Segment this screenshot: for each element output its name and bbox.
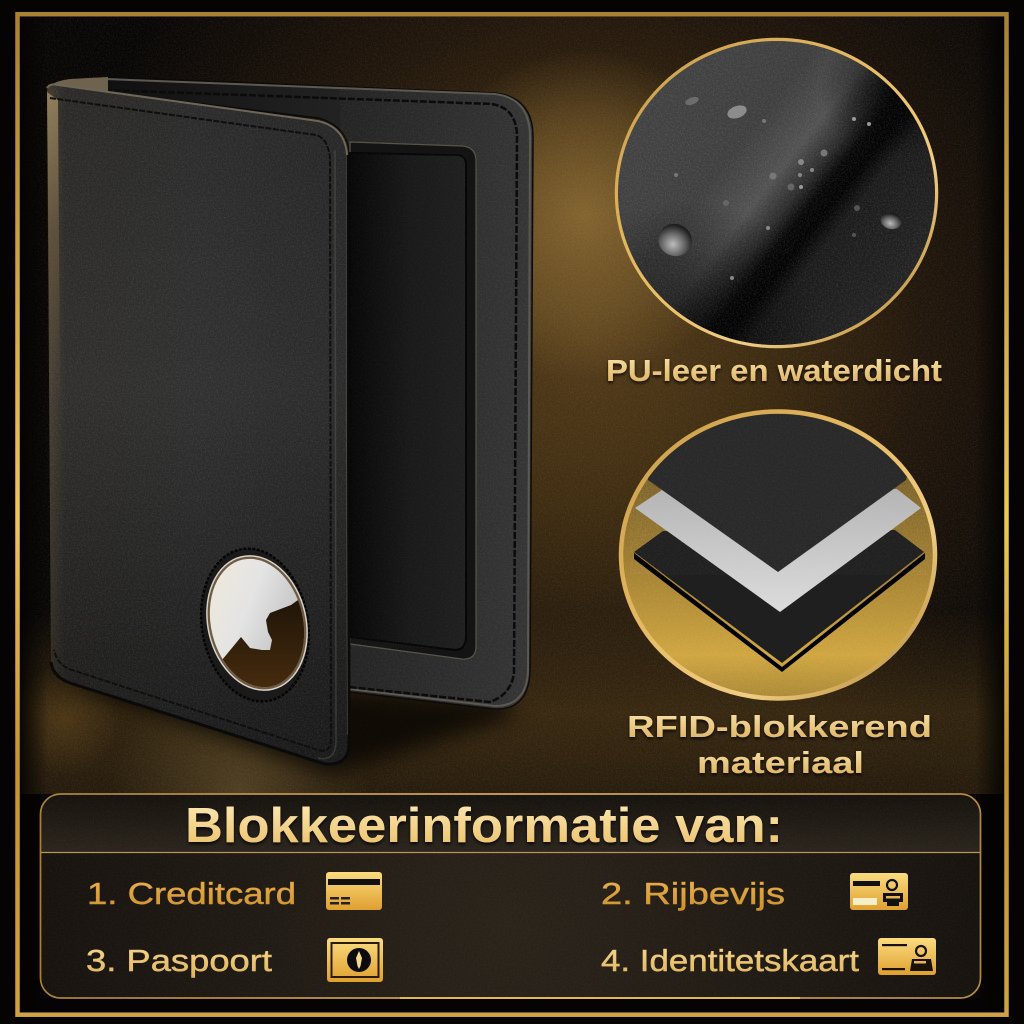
back cover [105,77,535,712]
circle: RFID material layers [620,400,940,700]
airtag slot [200,547,310,702]
back cover rim [105,79,530,706]
panel: blocking information [40,794,980,998]
item 2: 2. Rijbevijs [601,876,785,911]
label: RFID-blokkerend materiaal: materiaal [697,745,864,780]
label: PU-leer en waterdicht: PU-leer en waterdicht [606,353,942,388]
stitching [50,98,331,751]
top edge highlight [49,77,108,92]
item 3: 3. Paspoort [86,943,272,978]
front edge highlight [47,92,60,400]
water drops [653,95,903,280]
inner pocket [350,142,476,659]
icon: passport [327,938,383,982]
layer: top leather [630,400,930,575]
item 1: 1. Creditcard [87,876,296,911]
wallet illustration [40,77,535,780]
label: RFID-blokkerend materiaal [627,709,932,780]
panel header [40,794,980,852]
icon: credit card [326,872,382,910]
layer: bottom black [634,530,925,672]
front cover rim [47,84,348,735]
circle: PU leather with water drops [614,38,938,348]
wallet shadow [60,680,520,775]
item 4: 4. Identitetskaart [601,943,859,978]
icon: identity card [878,938,936,975]
label: RFID-blokkerend materiaal: RFID-blokkerend [627,709,932,744]
layer: silver shielding [635,489,921,612]
panel title: Blokkeerinformatie van: [185,799,783,853]
icon: driving licence [850,873,908,910]
front cover [40,80,360,780]
